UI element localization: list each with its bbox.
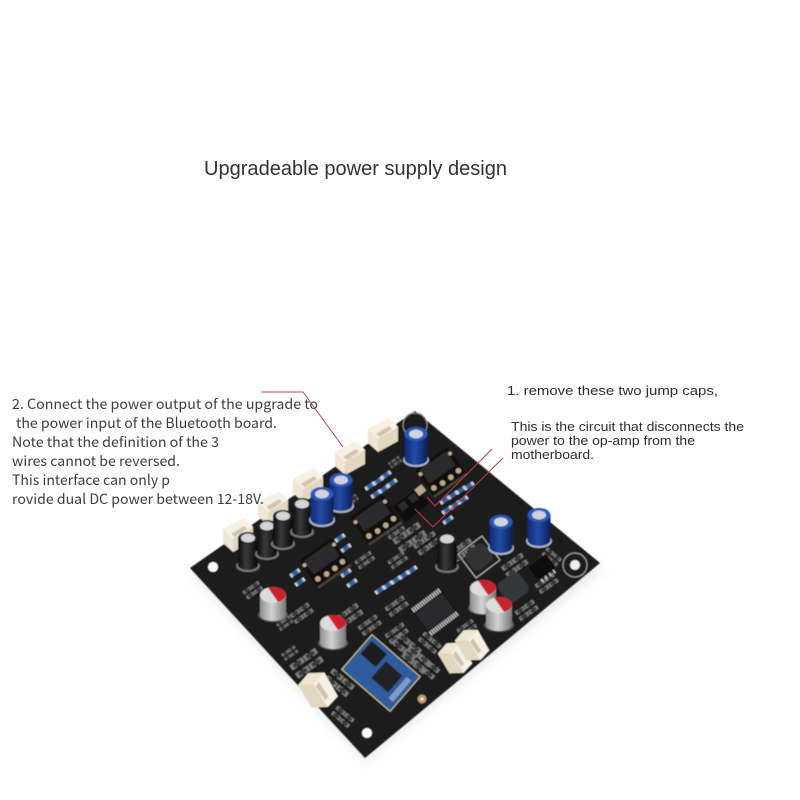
callout: upgrade power text: Note that the definition of the 3 xyxy=(12,432,219,452)
jumper caps xyxy=(393,484,434,522)
callout: upgrade power text: rovide dual DC power between 12-18V. xyxy=(12,489,264,509)
silver capacitors xyxy=(258,580,514,650)
callout: circuit description: power to the op-amp from the xyxy=(511,433,695,448)
callout: circuit description: This is the circuit that disconnects the xyxy=(511,419,744,434)
antenna socket xyxy=(418,694,426,704)
arrow: to jump cap one xyxy=(427,449,492,506)
smd components xyxy=(242,456,562,728)
bluetooth module xyxy=(342,635,420,711)
blue capacitors xyxy=(309,427,552,555)
circuit board photo xyxy=(190,411,604,762)
connectors xyxy=(223,418,490,708)
arrow: to power connector xyxy=(261,392,343,447)
ic chip xyxy=(410,588,460,636)
inductors xyxy=(458,536,531,605)
title: Upgradeable power supply design xyxy=(204,158,507,180)
callout: remove jump caps: 1. remove these two jump caps, xyxy=(507,383,718,398)
black capacitors xyxy=(236,498,459,573)
callout: upgrade power text xyxy=(12,394,318,509)
callout: circuit description: motherboard. xyxy=(511,447,594,462)
callout: circuit description xyxy=(511,419,744,462)
callout: upgrade power text: 2. Connect the power output of the upgrade to xyxy=(12,394,318,414)
small ic xyxy=(528,554,559,584)
callout: upgrade power text: This interface can only p xyxy=(12,470,170,490)
callout: upgrade power text: wires cannot be reversed. xyxy=(12,451,180,471)
mounting holes xyxy=(208,413,587,738)
arrow: to jump cap two xyxy=(415,458,503,527)
callout: upgrade power text: the power input of the Bluetooth board. xyxy=(16,413,277,433)
board body xyxy=(190,411,600,758)
op-amp chips xyxy=(299,447,467,589)
